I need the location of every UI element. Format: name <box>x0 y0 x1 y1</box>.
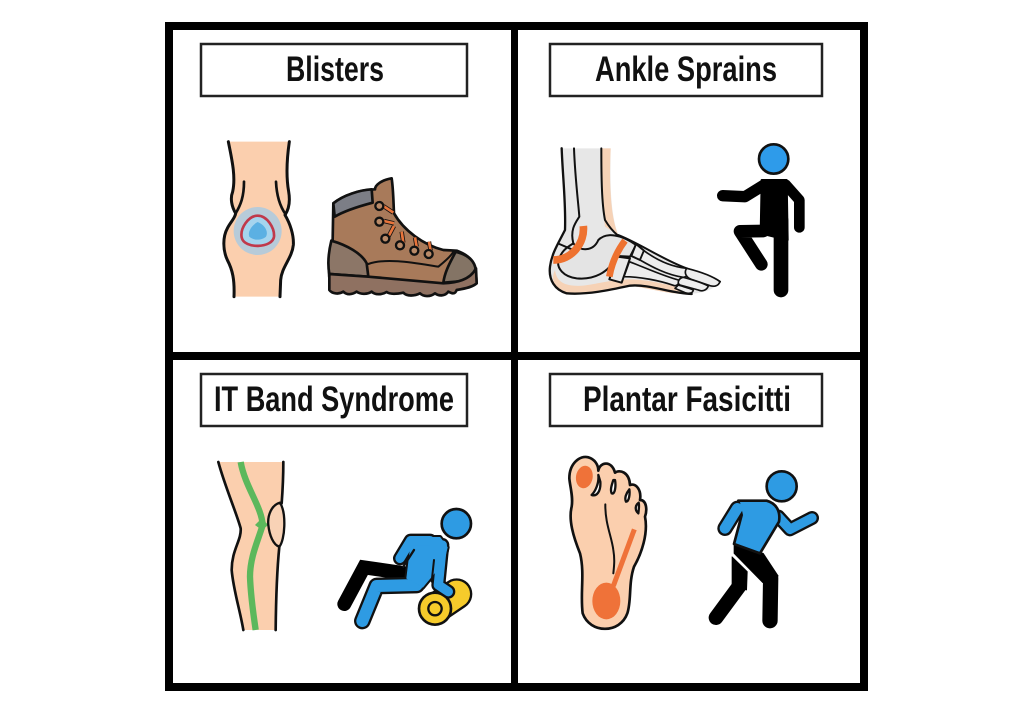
panel: ankle sprains <box>550 44 822 294</box>
heading: Blisters <box>201 44 467 96</box>
panel: IT band syndrome <box>201 374 471 630</box>
heading: Blisters: Blisters <box>286 50 384 89</box>
icon: ankle skeleton <box>550 148 720 294</box>
icon: walking figure <box>716 471 812 621</box>
heading: Plantar Fasicitti: Plantar Fasicitti <box>583 380 791 419</box>
icon: knee with blister <box>224 142 293 297</box>
outer frame and grid <box>165 22 868 691</box>
panel: blisters <box>201 44 477 297</box>
heading: IT Band Syndrome <box>201 374 467 426</box>
panel: plantar fasciitis <box>550 374 822 629</box>
icon: hiking boot <box>328 178 477 296</box>
heading: IT Band Syndrome: IT Band Syndrome <box>214 380 454 419</box>
icon: foam roller figure <box>344 509 471 625</box>
heading: Ankle Sprains <box>550 44 822 96</box>
icon: foot sole <box>569 457 646 629</box>
icon: standing balance figure <box>723 144 799 290</box>
heading: Ankle Sprains: Ankle Sprains <box>595 50 777 89</box>
icon: leg with IT band <box>218 462 285 630</box>
heading: Plantar Fasicitti <box>550 374 822 426</box>
